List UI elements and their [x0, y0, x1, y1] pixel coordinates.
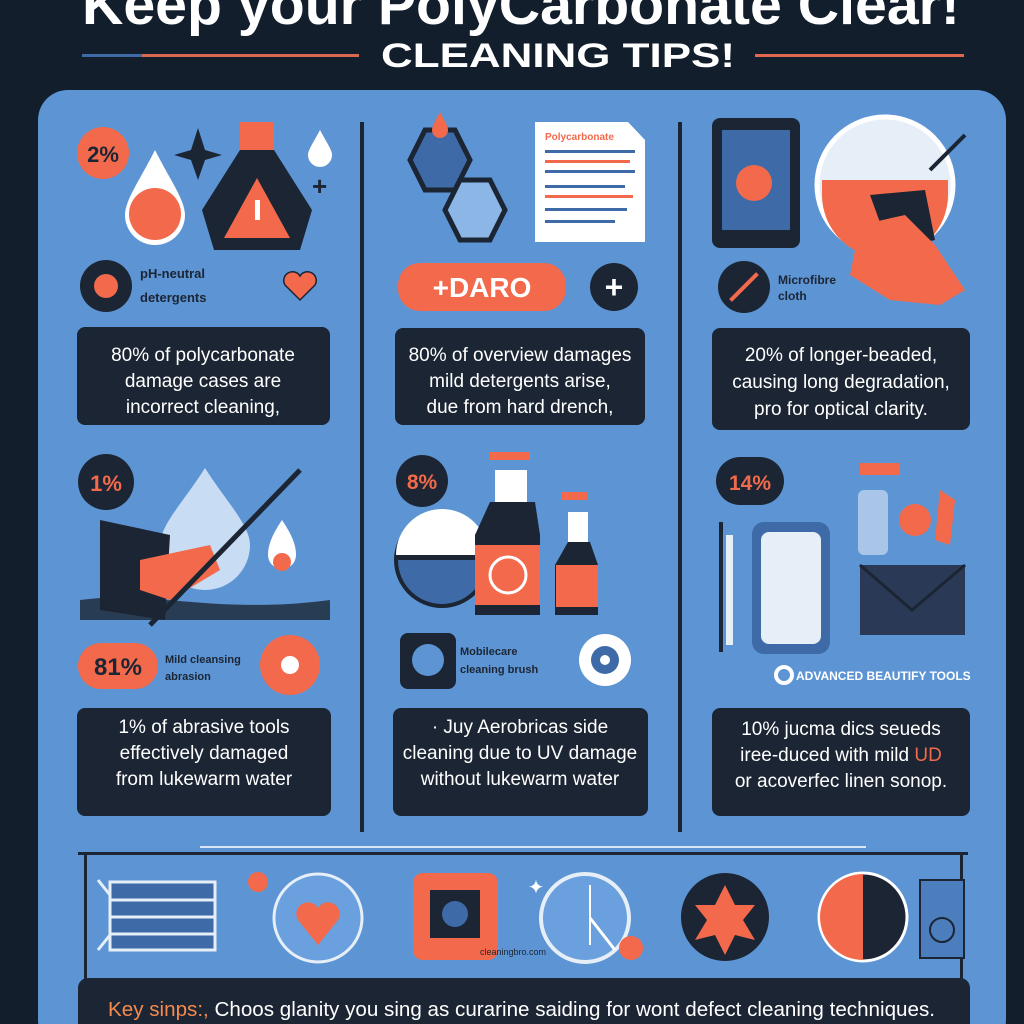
icon: plate with hand — [817, 117, 965, 305]
icon: clock — [541, 874, 643, 962]
key tips bar: Key sinps:, Choos glanity you sing as curarine saiding for wont defect cleaning techniques. — [108, 999, 935, 1021]
icon: badge 2%: 2% — [87, 142, 119, 167]
icon: plus circle — [590, 263, 638, 311]
panel: column 2 bottom: Mobilecare — [460, 646, 517, 658]
icon: orange square — [413, 873, 498, 960]
icon: orange circle — [260, 635, 320, 695]
text box: row1 col1: incorrect cleaning, — [126, 397, 280, 418]
icon: dark circle — [80, 260, 132, 312]
badge: DARO: +DARO — [433, 272, 531, 303]
icon: star circle — [681, 873, 769, 961]
panel: column 1 bottom: abrasion — [165, 671, 211, 683]
text box: row1 col2: mild detergents arise, — [429, 371, 611, 392]
text box: row2 col2: cleaning due to UV damage — [403, 743, 637, 764]
icon: small drop — [268, 520, 296, 571]
icon: spray and sponge — [858, 463, 955, 555]
icon: bottle — [712, 118, 800, 248]
bottom icon strip: cleaningbro.com — [480, 947, 546, 957]
badge 81%: 81% — [94, 654, 142, 681]
panel: column 1 bottom: Mild cleansing — [165, 654, 241, 666]
text box: row2 col2 — [393, 708, 648, 816]
icon: small bottle — [555, 492, 598, 615]
text box: row2 col1: from lukewarm water — [116, 769, 293, 790]
panel: column 2 bottom: cleaning brush — [460, 664, 539, 676]
panel: column 2 top — [398, 112, 645, 311]
icon: warning bottle — [202, 122, 312, 250]
text box: row1 col2: 80% of overview damages — [409, 345, 631, 366]
text box: row2 col1: 1% of abrasive tools — [118, 717, 290, 738]
title: CLEANING TIPS! — [381, 37, 735, 75]
badge 1% — [78, 454, 134, 510]
icon: gem square — [400, 633, 456, 689]
label: tools: ADVANCED BEAUTIFY TOOLS — [796, 669, 971, 683]
panel: column 3 top — [712, 117, 965, 313]
icon: drawer — [98, 872, 268, 950]
text box: row2 col2: without lukewarm water — [420, 769, 620, 790]
title — [82, 0, 964, 75]
badge 8%: 8% — [407, 471, 437, 494]
panel: column 1 top — [77, 122, 332, 312]
icon: plus circle: + — [605, 269, 623, 305]
icon: hand with stick — [100, 470, 300, 625]
panel: column 3 bottom — [716, 457, 971, 683]
text box: row2 col3: iree-duced with mild UD — [740, 745, 942, 766]
text box: row1 col3: causing long degradation, — [732, 372, 950, 393]
text box: row2 col1: effectively damaged — [120, 743, 288, 764]
icon: small drop — [308, 130, 332, 167]
panel: column 1 top: + — [312, 171, 327, 201]
text box: row2 col3: or acoverfec linen sonop. — [735, 771, 947, 792]
icon: gauge — [819, 873, 907, 961]
badge: DARO — [398, 263, 566, 311]
icon: squeegee — [719, 522, 733, 652]
text box: row2 col3 — [712, 708, 970, 816]
panel: column 1 top: detergents — [140, 290, 206, 305]
panel: column 1 bottom — [78, 454, 330, 695]
text box: row1 col3: pro for optical clarity. — [754, 399, 928, 420]
label: pH-neutral — [140, 266, 205, 281]
icon: badge 2% — [77, 127, 129, 179]
text box: row2 col1 — [77, 708, 331, 816]
bottom icon strip — [78, 846, 968, 980]
text box: row1 col1 — [77, 327, 330, 425]
icon: large spray bottle — [475, 452, 540, 615]
text box: row2 col2: · Juy Aerobricas side — [432, 717, 608, 738]
panel: column 2 bottom — [394, 452, 631, 689]
icon: heart check — [274, 874, 362, 962]
text box: row1 col3 — [712, 328, 970, 430]
bottom icon strip: ✦ — [528, 877, 544, 899]
key tips bar — [78, 978, 970, 1024]
text box: row1 col2: due from hard drench, — [427, 397, 613, 418]
text box: row2 col3: 10% jucma dics seueds — [741, 719, 941, 740]
panel: column 3 top: cloth — [778, 289, 807, 303]
icon: document — [535, 122, 645, 242]
badge 14%: 14% — [729, 472, 771, 495]
icon: speaker box — [920, 880, 964, 958]
text box: row1 col1: damage cases are — [125, 371, 281, 392]
panel: column 3 top: Microfibre — [778, 273, 836, 287]
badge 8% — [396, 455, 448, 507]
icon: hexagons — [410, 112, 505, 240]
badge 1%: 1% — [90, 471, 122, 496]
icon: slash circle — [718, 261, 770, 313]
icon: water drop — [125, 150, 185, 245]
text box: row1 col3: 20% of longer-beaded, — [745, 345, 937, 366]
icon: heart — [284, 272, 316, 300]
badge 81% — [78, 643, 158, 689]
icon: gear circle — [579, 634, 631, 686]
icon: envelope — [860, 565, 965, 635]
icon: bowl — [394, 509, 490, 608]
icon: big drop — [160, 468, 250, 590]
text box: row1 col2 — [395, 328, 645, 425]
text box: row1 col1: 80% of polycarbonate — [111, 345, 295, 366]
icon: phone — [752, 522, 830, 654]
icon: document: Polycarbonate — [545, 132, 614, 143]
icon: sparkle — [174, 128, 222, 180]
badge 14% — [716, 457, 784, 505]
